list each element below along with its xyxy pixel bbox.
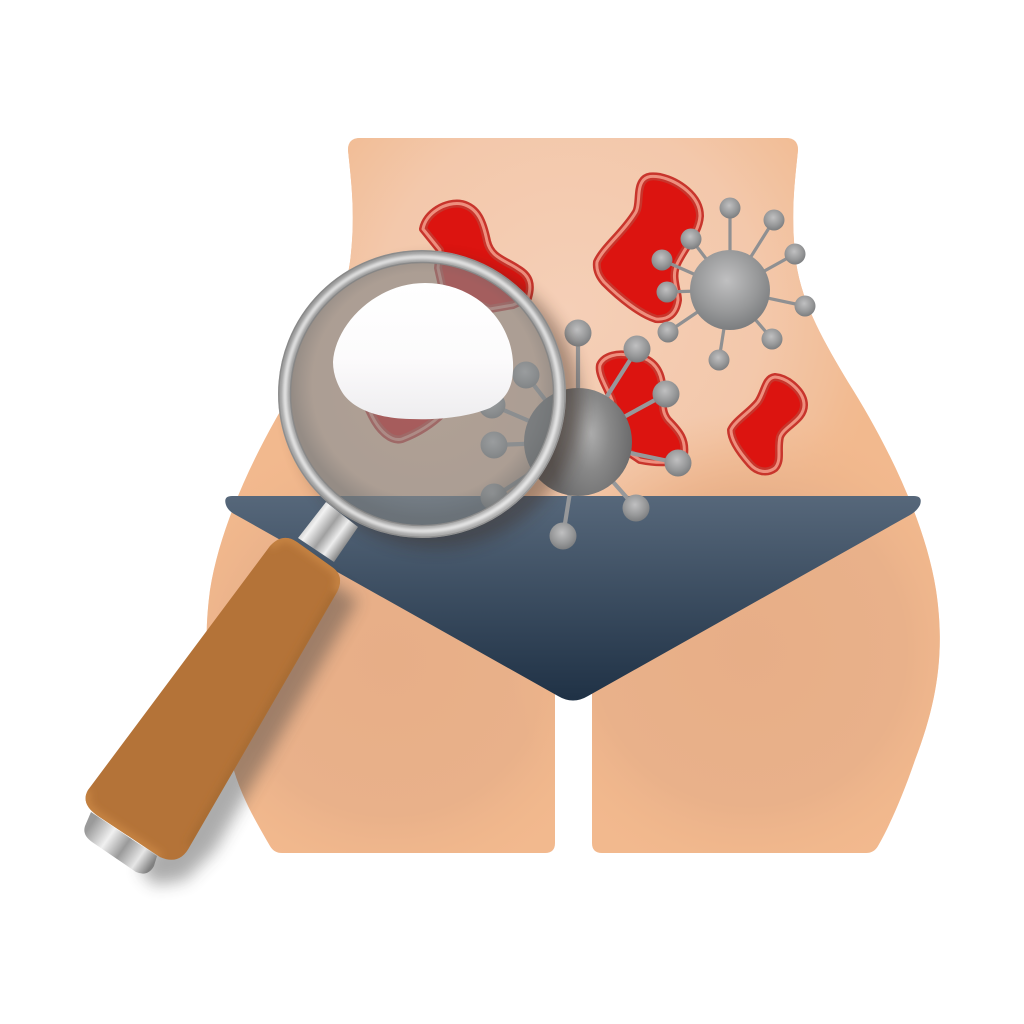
handle neck [298,502,358,562]
patch: upper right [597,176,700,319]
patch: lower right [731,377,804,471]
metal ring [279,251,565,537]
lens glass [290,262,554,526]
virus: large [478,320,692,550]
patch: under lens [350,370,470,440]
patch: upper left [423,204,530,309]
cast shadow: lens and handle [140,260,580,885]
lower torso silhouette [206,138,940,853]
inflamed patches [350,176,804,471]
wooden handle [86,538,340,860]
magnifying glass [84,251,580,885]
underwear [225,496,921,700]
virus: small [652,198,816,370]
patch: centre [600,354,684,462]
white highlight shape in lens [333,283,513,419]
handle end cap [84,812,157,874]
